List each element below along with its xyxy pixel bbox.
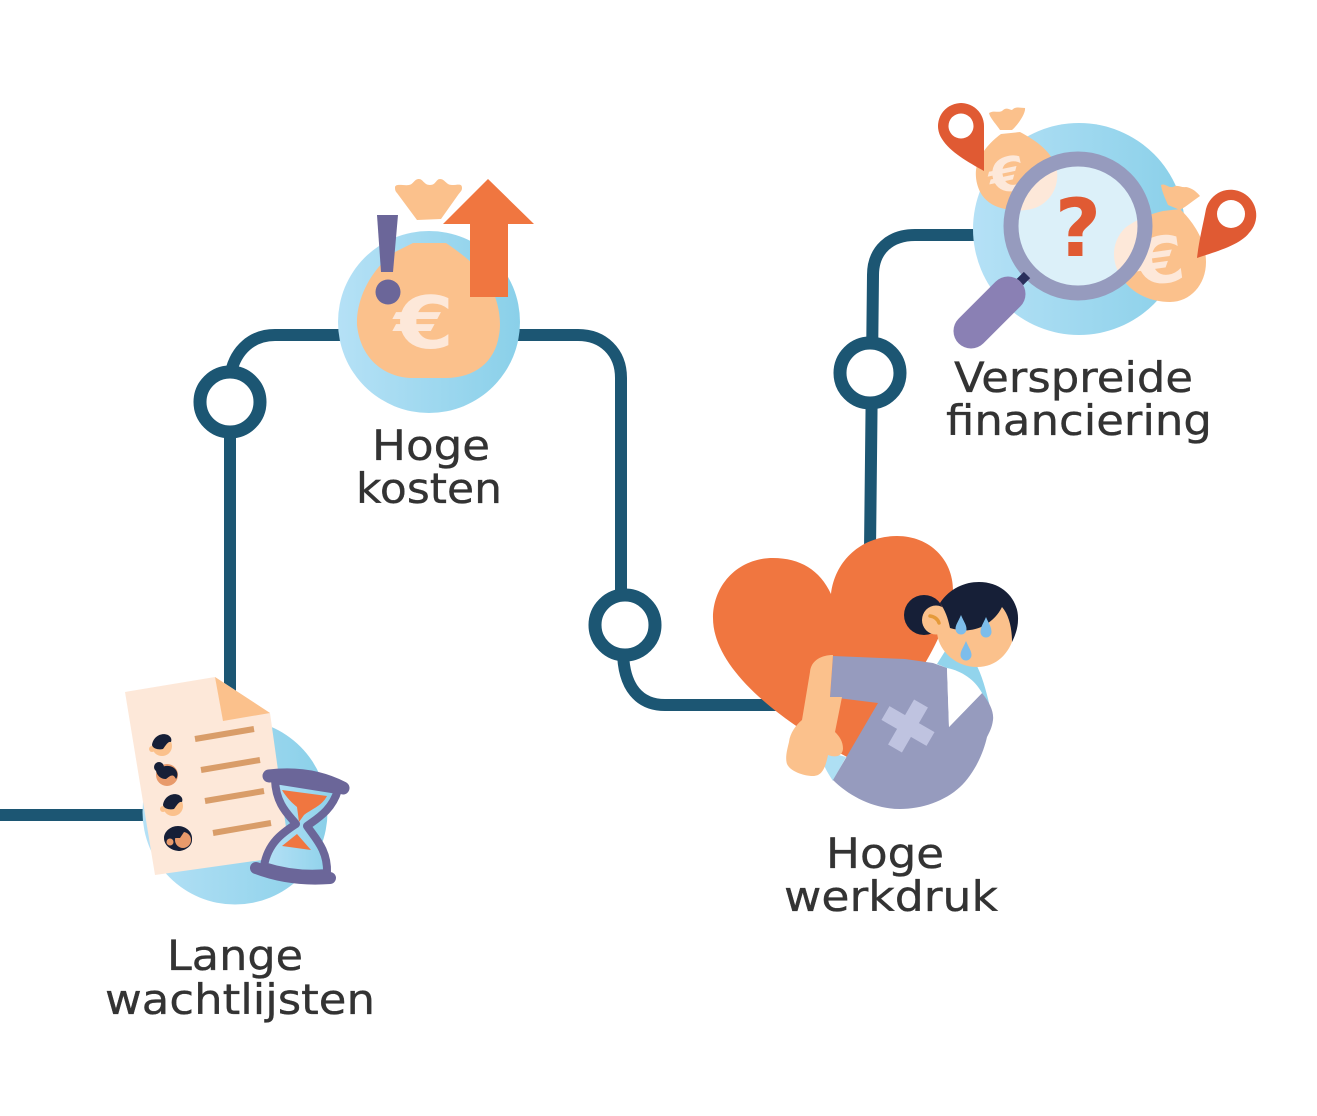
- question mark: ?: [1055, 182, 1101, 275]
- label: Hoge werkdruk: Hoge: [826, 829, 944, 878]
- label: Lange wachtlijsten: Lange: [167, 931, 303, 980]
- label: Hoge werkdruk: [784, 829, 999, 921]
- money seen through glass: [1020, 170, 1138, 270]
- label: Lange wachtlijsten: [105, 931, 375, 1024]
- ear: [922, 606, 950, 634]
- left money bag: [976, 132, 1057, 210]
- arm and hand: [786, 655, 843, 776]
- route line: [0, 235, 980, 815]
- label: Hoge kosten: [356, 421, 502, 513]
- tears: [956, 615, 992, 660]
- right money bag: [1114, 209, 1206, 302]
- arrow up: [443, 179, 534, 297]
- label: Verspreide financiering: financiering: [946, 396, 1212, 445]
- lower blue piece: [823, 752, 846, 781]
- hair bun: [904, 595, 944, 635]
- magnifier glass: [1018, 166, 1138, 286]
- document: [125, 677, 290, 875]
- hair: [940, 582, 1018, 642]
- left euro: €: [982, 144, 1032, 206]
- magnifier neck: [1018, 275, 1027, 284]
- right location pin: [1197, 190, 1256, 258]
- collar: [937, 648, 990, 707]
- face: [937, 600, 1016, 667]
- icon: money bag and rising arrow: [338, 179, 534, 413]
- route node 2: [595, 595, 655, 655]
- label: Hoge werkdruk: werkdruk: [784, 872, 999, 921]
- inner ear: [930, 616, 939, 623]
- label: Verspreide financiering: Verspreide: [954, 353, 1193, 402]
- euro sign: €: [392, 281, 454, 365]
- hourglass: [256, 775, 343, 879]
- label: Lange wachtlijsten: wachtlijsten: [105, 975, 375, 1024]
- bag tuft: [395, 179, 462, 220]
- icon: waiting list and hourglass: [125, 677, 343, 904]
- right bag tuft: [1161, 185, 1200, 210]
- right euro: €: [1126, 222, 1190, 302]
- left bag tuft: [989, 108, 1025, 130]
- route node 3: [840, 343, 900, 403]
- white v-neck: [947, 668, 982, 727]
- label: Verspreide financiering: [946, 353, 1212, 445]
- left location pin: [938, 103, 984, 171]
- label: Hoge kosten: kosten: [356, 464, 502, 513]
- magnifier handle: [971, 294, 1008, 331]
- right pin hole: [1217, 200, 1245, 228]
- route node 1: [200, 372, 260, 432]
- left pin hole: [948, 114, 974, 138]
- tunic cross: [872, 690, 944, 762]
- icon: magnifier over scattered money: [938, 103, 1256, 335]
- heart: [713, 536, 953, 757]
- list rows: [195, 729, 271, 833]
- icon: overworked nurse carrying heart: [713, 536, 1018, 809]
- exclamation mark: [376, 215, 400, 304]
- document fold: [215, 677, 270, 721]
- magnifier ring: [1011, 159, 1145, 293]
- list faces: [149, 734, 192, 851]
- tunic: [830, 656, 993, 809]
- money bag: [357, 243, 500, 378]
- label: Hoge kosten: Hoge: [372, 421, 490, 470]
